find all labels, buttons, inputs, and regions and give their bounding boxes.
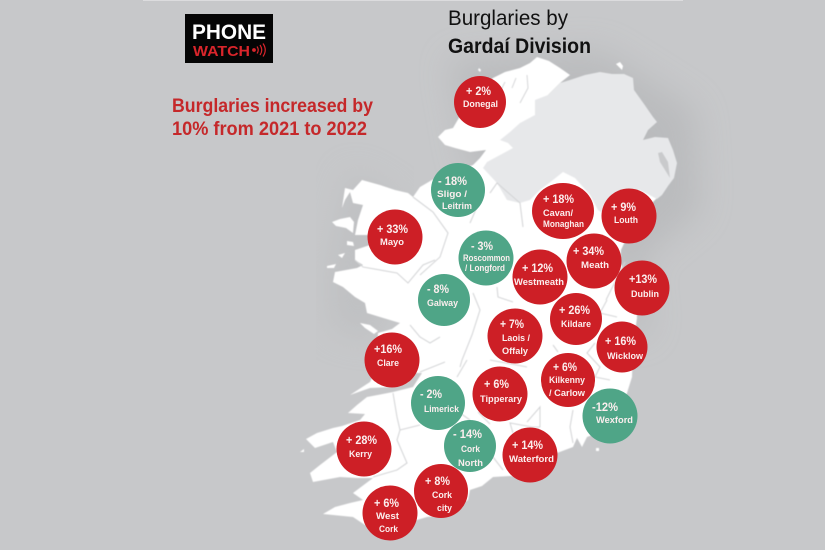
marker: Sligo / Leitrim: - 18% [438, 176, 467, 188]
marker: Wicklow [596, 322, 648, 372]
marker: Clare [364, 332, 420, 388]
marker: Louth [602, 188, 656, 244]
marker: Cork city: + 8% [425, 476, 450, 488]
callout: national increase [172, 96, 373, 140]
marker: Cork city: Cork [432, 490, 453, 501]
logo: Phone Watch: WATCH [193, 43, 250, 60]
map: Northern Ireland [483, 72, 677, 215]
marker: Louth: Louth [614, 215, 638, 226]
marker: West Cork: Cork [379, 524, 399, 535]
marker: Cavan / Monaghan: Cavan/ [543, 208, 573, 219]
marker: Galway [418, 274, 470, 326]
map: Ireland [300, 57, 677, 535]
marker: Kilkenny / Carlow: / Carlow [549, 388, 586, 399]
marker: Tipperary: Tipperary [480, 394, 523, 405]
marker: Limerick [411, 376, 465, 430]
marker: Cavan / Monaghan: Monaghan [543, 219, 584, 230]
callout: national increase: Burglaries increased by [172, 96, 373, 117]
marker: Westmeath: + 12% [522, 263, 553, 275]
marker: Roscommon / Longford: Roscommon [463, 253, 510, 264]
marker: Kildare: + 26% [559, 305, 590, 317]
marker: Donegal: + 2% [466, 86, 491, 98]
marker: Cavan / Monaghan [532, 183, 594, 239]
marker: Waterford: + 14% [512, 440, 543, 452]
marker: Clare: Clare [377, 358, 399, 369]
marker: Meath: Meath [581, 260, 609, 271]
map: Gardaí division boundaries [355, 183, 625, 477]
marker: Kilkenny / Carlow: Kilkenny [549, 375, 586, 386]
map: Strangford Lough [658, 152, 670, 178]
marker: Cork North [444, 420, 496, 472]
marker: Sligo / Leitrim: Sligo / [437, 189, 467, 200]
marker: West Cork: West [376, 511, 400, 522]
marker: Tipperary [472, 366, 528, 422]
map: Republic of Ireland [306, 57, 658, 535]
marker: Kerry [336, 422, 392, 476]
marker: Wexford [582, 388, 638, 444]
islands [300, 62, 623, 452]
marker: Cork North: Cork [461, 444, 481, 455]
marker: Roscommon / Longford [458, 230, 514, 286]
marker: Kildare: Kildare [561, 319, 591, 330]
marker: Tipperary: + 6% [484, 379, 509, 391]
logo: Phone Watch [185, 14, 273, 63]
marker: Cork North: - 14% [453, 429, 482, 441]
marker: Westmeath: Westmeath [514, 277, 564, 288]
marker: Wicklow: Wicklow [607, 351, 644, 362]
marker: Roscommon / Longford: / Longford [465, 263, 505, 274]
marker: Westmeath [512, 250, 568, 304]
marker: Cork North: North [458, 458, 483, 469]
marker: Laois / Offaly: Laois / [502, 333, 530, 344]
marker: Limerick: - 2% [420, 389, 442, 401]
marker: Dublin: +13% [629, 274, 657, 286]
marker: Dublin [614, 260, 670, 316]
marker: Kildare [550, 293, 602, 345]
marker: Dublin: Dublin [631, 289, 659, 300]
title [448, 7, 591, 58]
marker: Clare: +16% [374, 344, 402, 356]
marker: West Cork [362, 486, 418, 540]
marker: Sligo / Leitrim [431, 163, 485, 217]
marker: Sligo / Leitrim: Leitrim [442, 201, 472, 212]
marker: Louth: + 9% [611, 202, 636, 214]
title: Gardaí Division [448, 35, 591, 58]
marker: Kerry: Kerry [349, 449, 373, 460]
marker: West Cork: + 6% [374, 498, 399, 510]
title: Burglaries by [448, 7, 568, 30]
marker: Kilkenny / Carlow [541, 353, 595, 407]
marker: Kilkenny / Carlow: + 6% [553, 362, 577, 374]
marker: Mayo: Mayo [380, 237, 404, 248]
marker: Meath: + 34% [573, 246, 604, 258]
marker: Galway: Galway [427, 298, 459, 309]
marker: Wexford: Wexford [596, 415, 633, 426]
marker: Cork city: city [437, 503, 453, 514]
marker: Wicklow: + 16% [605, 336, 636, 348]
marker: Cavan / Monaghan: + 18% [543, 194, 574, 206]
marker: Waterford [502, 428, 558, 482]
marker: Limerick: Limerick [424, 404, 460, 415]
marker: Galway: - 8% [427, 284, 449, 296]
marker: Mayo: + 33% [377, 224, 408, 236]
marker: Waterford: Waterford [509, 454, 554, 465]
callout: national increase: 10% from 2021 to 2022 [172, 119, 367, 140]
marker: Donegal: Donegal [463, 99, 498, 110]
marker: Laois / Offaly: Offaly [502, 346, 529, 357]
marker: Cork city [414, 464, 468, 518]
marker: Meath [566, 234, 622, 288]
marker: Laois / Offaly: + 7% [500, 319, 524, 331]
marker: Donegal [454, 76, 506, 128]
marker: Roscommon / Longford: - 3% [471, 241, 493, 253]
marker: Laois / Offaly [488, 308, 542, 364]
marker: Wexford: -12% [592, 402, 618, 414]
logo: Phone Watch: PHONE [192, 21, 266, 44]
marker: Mayo [368, 210, 422, 264]
marker: Kerry: + 28% [346, 435, 377, 447]
